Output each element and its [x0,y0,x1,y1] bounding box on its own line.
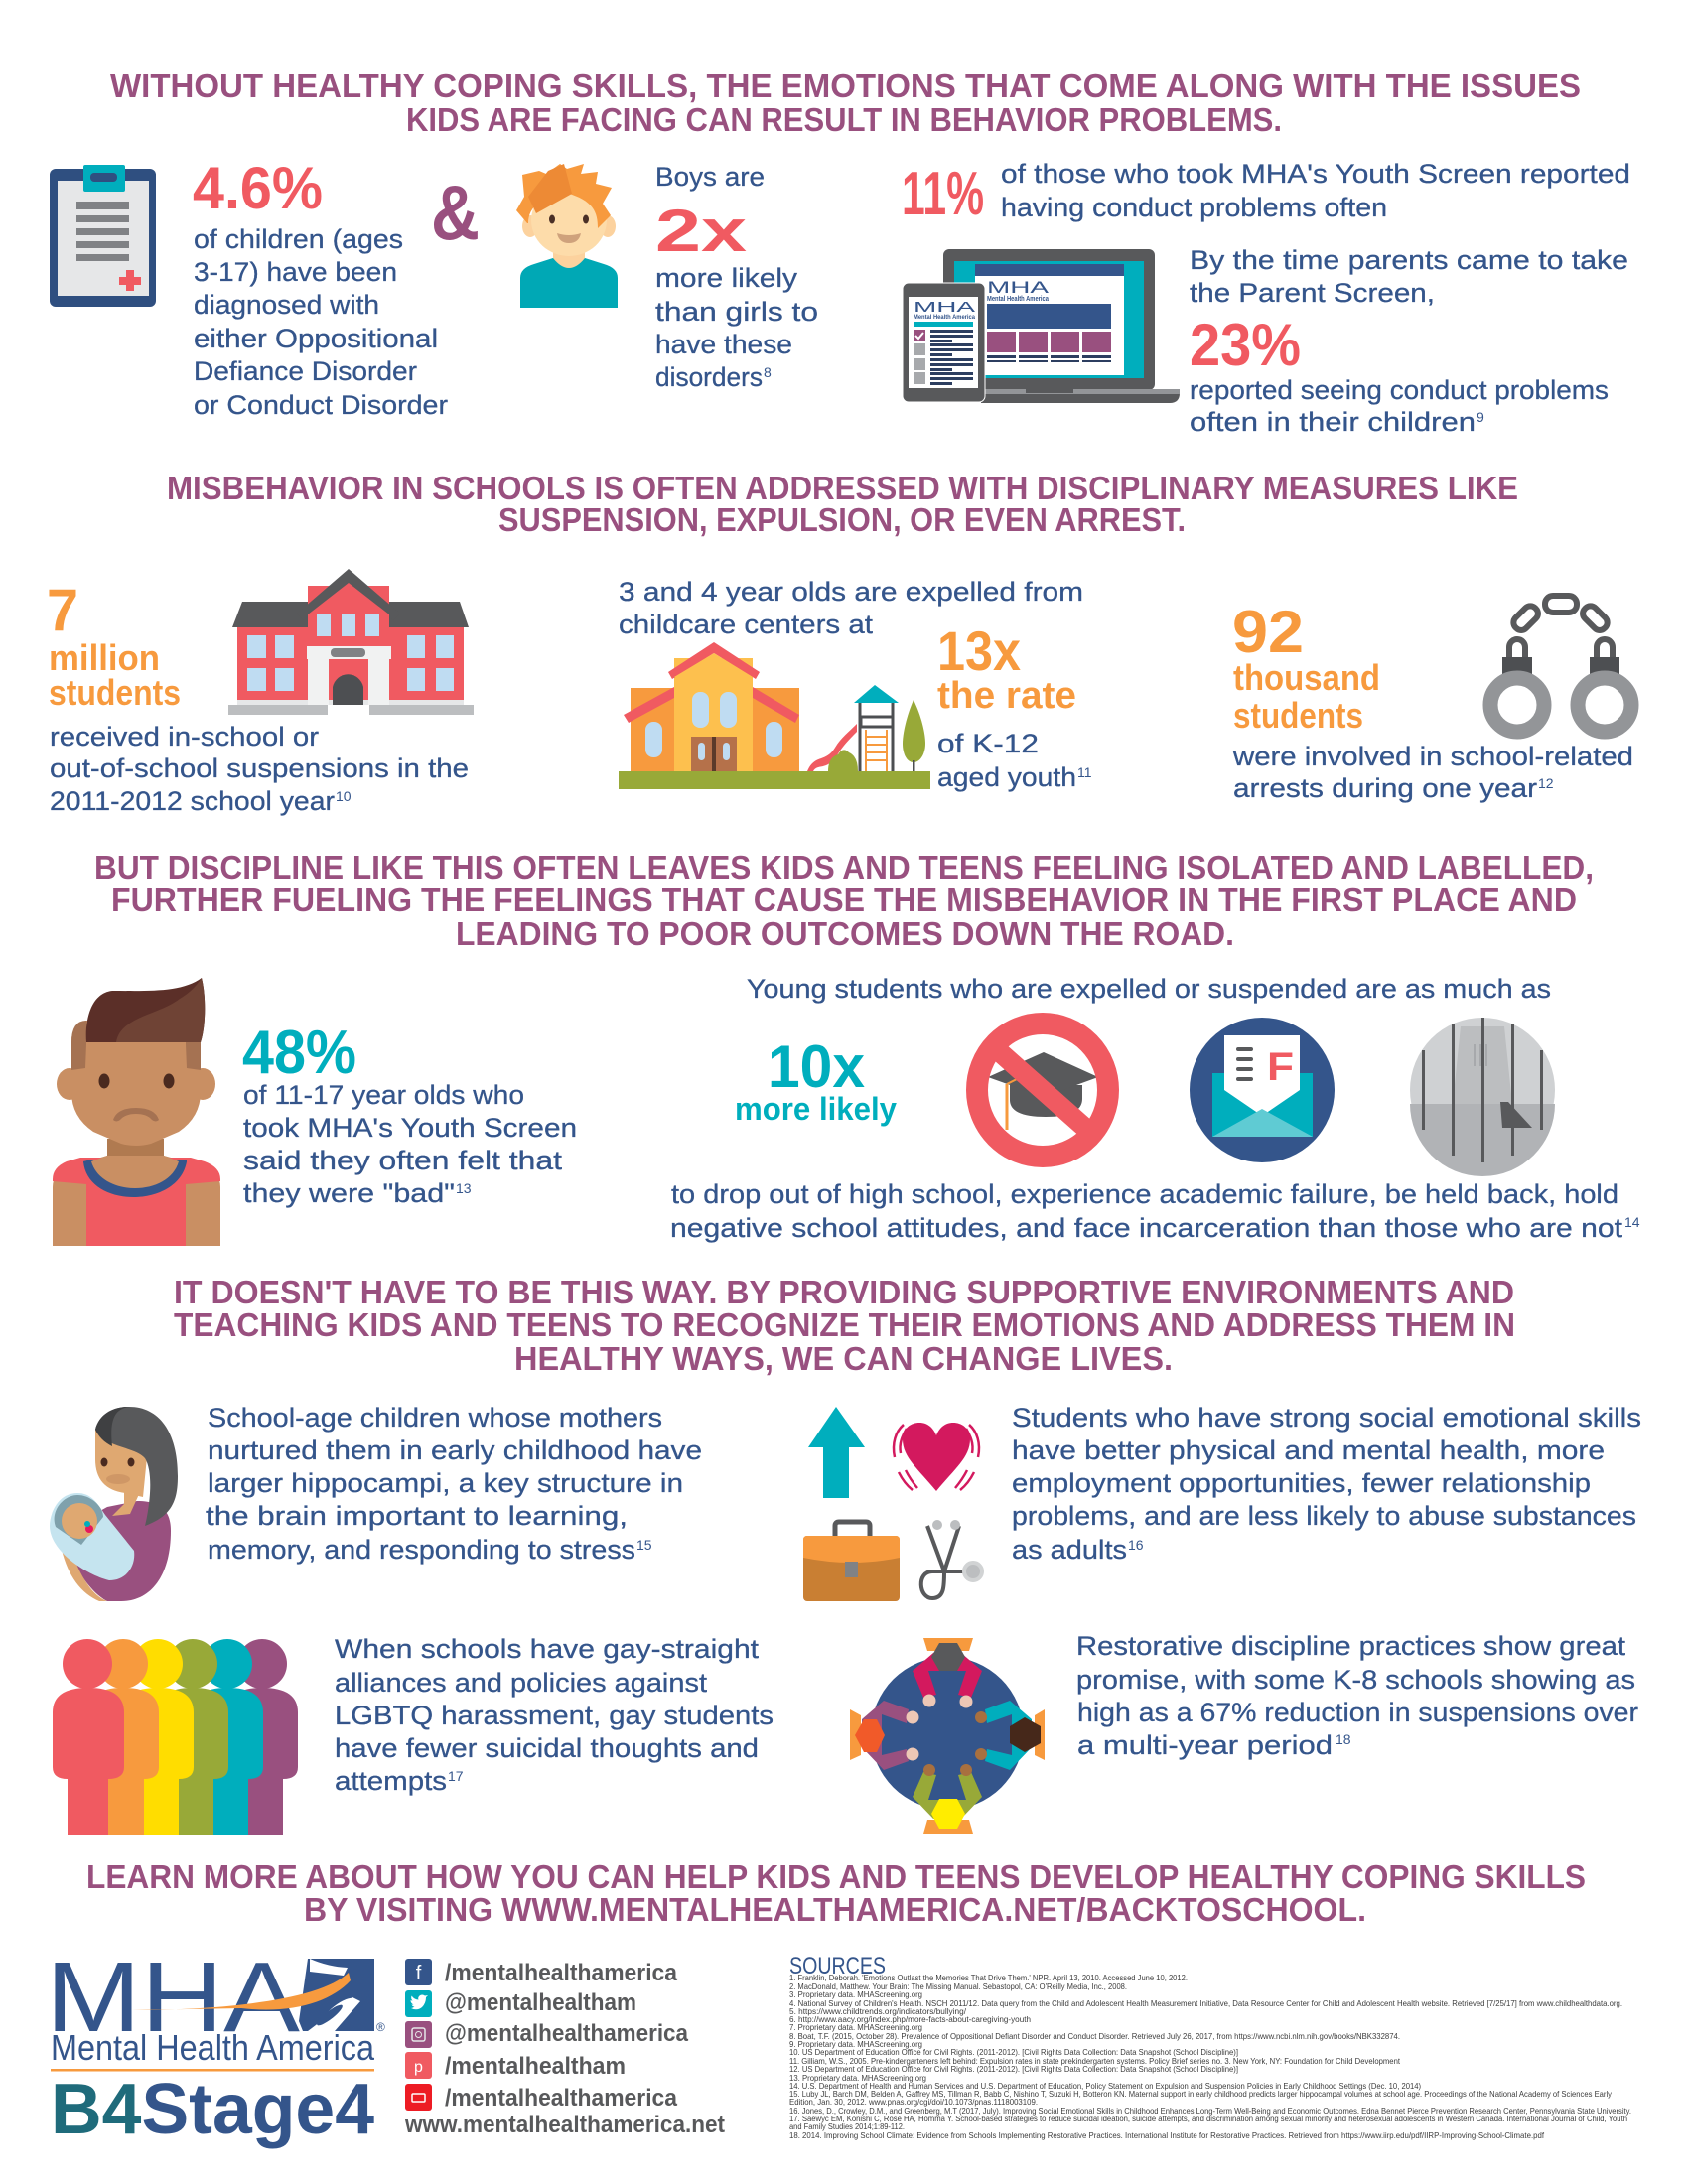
stat: 23 percent parent screen: often in their children [1190,407,1476,437]
social media links: www.mentalhealthamerica.net [404,2112,725,2138]
stat: 10x more likely: 10x [768,1033,865,1100]
icon: mother holding baby [50,1407,178,1601]
text: childcare expulsion intro [619,577,1083,639]
text: gay-straight alliances: LGBTQ harassment, gay students [335,1701,774,1730]
text: childcare expulsion intro: childcare centers at [619,610,874,639]
social media links: @mentalhealtham [445,1989,636,2016]
icon: preschool with playground [619,642,930,789]
sources list: 1. Franklin, Deborah. 'Emotions Outlast the Memories That Drive Them.' NPR. April 13, 2010. Accessed June 10, 2012. [789,1973,1188,1982]
stat: 4.6 percent [193,155,448,420]
heading: disciplinary measures [167,470,1518,538]
sources list: 2. MacDonald, Matthew. Your Brain: The Missing Manual. Sebastopol, CA: O'Reilly Media, Inc., 2008. [789,1981,1127,1991]
heading: it does not have to be this way [174,1274,1515,1377]
sources list [789,1953,1631,2140]
stat: 92 thousand students: arrests during one year [1233,773,1537,803]
stat: 48 percent felt bad: 13 [456,1180,472,1196]
text: suspensions: 2011-2012 school year [50,786,335,816]
text: social emotional skills: 16 [1128,1537,1144,1553]
icon: sad teen boy [53,978,220,1246]
text: nurturing and hippocampi: nurtured them in early childhood have [208,1435,702,1465]
text: young students intro: Young students who are expelled or suspended are as much as [747,974,1551,1004]
heading: isolated and labelled: FURTHER FUELING THE FEELINGS THAT CAUSE THE MISBEHAVIOR IN THE FIRST PLACE AND [111,882,1577,918]
stat: 13x the rate: aged youth [937,762,1076,792]
stat: boys 2x: than girls to [655,297,818,327]
sources list: 10. US Department of Education Office for Civil Rights. (2011-2012). [Civil Rights Data Collection: Data Snapshot (School Discipline)] [789,2047,1238,2057]
logo: Mental Health America B4Stage4: ® [376,2020,385,2034]
heading: isolated and labelled: LEADING TO POOR OUTCOMES DOWN THE ROAD. [456,915,1234,952]
social media links [404,1959,725,2138]
text: suspensions: out-of-school suspensions in the [50,753,469,783]
icon: laptop and phone with MHA screener: Mental Health America [914,315,976,321]
text: outcomes of expulsion [670,1179,1640,1243]
stat: 92 thousand students [1232,599,1633,803]
text: social emotional skills: have better physical and mental health, more [1012,1435,1605,1465]
stat: 13x the rate: 13x [937,619,1021,682]
stat: 4.6 percent: either Oppositional [194,324,438,353]
text: outcomes of expulsion: 14 [1624,1214,1640,1230]
social media links: @mentalhealthamerica [445,2020,689,2047]
stat: 48 percent felt bad: of 11-17 year olds who [243,1080,524,1110]
stat: 48 percent felt bad: 48% [242,1019,356,1087]
text: restorative discipline: high as a 67% reduction in suspensions over [1077,1698,1638,1727]
heading: disciplinary measures: MISBEHAVIOR IN SCHOOLS IS OFTEN ADDRESSED WITH DISCIPLINARY MEASURES LIKE [167,470,1518,506]
icon: laptop and phone with MHA screener: MHA [914,299,975,316]
stat: boys 2x [655,162,818,392]
heading: behavior problems [110,68,1581,138]
heading: learn more call to action [86,1858,1586,1928]
stat: 92 thousand students: thousand [1233,657,1380,698]
stat: 10x more likely [735,1033,897,1127]
stat: 11 percent youth screen: of those who took MHA's Youth Screen reported [1001,159,1630,189]
stat: 7 million students [47,577,181,713]
icon: vibrating heart [894,1423,979,1491]
text: social emotional skills: as adults [1012,1535,1127,1565]
icon: people around a table [850,1638,1045,1834]
logo: Mental Health America B4Stage4: Mental Health America [51,2027,375,2068]
sources list: 18. 2014. Improving School Climate: Evidence from Schools Implementing Restorative Practices. International Institute for Restorative Practices. Retrieved from https://www.iirp.edu/pdf/IIRP-Improving-School-Climate.pdf [789,2130,1545,2140]
text: social emotional skills [1012,1403,1641,1565]
sources list: 7. Proprietary data. MHAScreening.org [789,2022,922,2032]
heading: isolated and labelled: BUT DISCIPLINE LIKE THIS OFTEN LEAVES KIDS AND TEENS FEELING ISOLATED AND LABELLED, [94,849,1594,886]
stat: boys 2x: more likely [655,263,798,293]
text: nurturing and hippocampi [206,1403,702,1565]
heading: behavior problems: KIDS ARE FACING CAN RESULT IN BEHAVIOR PROBLEMS. [406,101,1282,138]
icon: laptop and phone with MHA screener: Mental Health America [987,296,1049,303]
stat: 4.6 percent: 4.6% [193,155,323,221]
text: nurturing and hippocampi: 15 [636,1537,652,1553]
icon: red school building [228,569,474,715]
heading: learn more call to action: BY VISITING WWW.MENTALHEALTHAMERICA.NET/BACKTOSCHOOL. [304,1891,1366,1928]
stat: 13x the rate: 11 [1077,764,1092,780]
social media links: f [416,1963,422,1984]
heading: it does not have to be this way: HEALTHY WAYS, WE CAN CHANGE LIVES. [514,1340,1173,1377]
stat: 23 percent parent screen: the Parent Screen, [1190,278,1435,308]
sources list: 6. http://www.aacy.org/index.php/more-facts-about-caregiving-youth [789,2014,1031,2024]
heading: learn more call to action: LEARN MORE ABOUT HOW YOU CAN HELP KIDS AND TEENS DEVELOP HEALTHY COPING SKILLS [86,1858,1586,1895]
stat: 4.6 percent: of children (ages [194,224,403,254]
sources list: 8. Boat, T.F. (2015, October 28). Prevalence of Oppositional Defiant Disorder and Conduct Disorder. Retrieved July 26, 2017, from https://www.ncbi.nlm.nih.gov/books/NBK332874. [789,2031,1400,2041]
ampersand: & [431,169,480,256]
stat: boys 2x: Boys are [655,162,765,192]
stat: 23 percent parent screen: 23% [1190,312,1301,378]
sources list: SOURCES [789,1953,886,1979]
sources list: 4. National Survey of Children's Health. NSCH 2011/12. Data query from the Child and Adolescent Health Measurement Initiative, Data Resource Center for Child and Adolescent Health website. Retrieved [7/25/17] from www.childhealthdata.org. [789,1998,1622,2008]
sources list: Edition, Jan. 30, 2012. www.pnas.org/cgi/doi/10.1073/pnas.1118003109. [789,2097,1038,2107]
heading: it does not have to be this way: TEACHING KIDS AND TEENS TO RECOGNIZE THEIR EMOTIONS AND ADDRESS THEM IN [174,1306,1515,1343]
stat: 7 million students: million [49,637,160,678]
icon: upward arrow [808,1407,865,1498]
text: outcomes of expulsion: negative school attitudes, and face incarceration than those who are not [670,1213,1623,1243]
text: restorative discipline: Restorative discipline practices show great [1076,1631,1626,1661]
stat: 23 percent parent screen: 9 [1477,409,1484,425]
stat: 48 percent felt bad: said they often felt that [243,1146,563,1175]
heading: isolated and labelled [94,849,1594,952]
stat: 23 percent parent screen: By the time parents came to take [1190,245,1628,275]
social media links: /mentalhealthamerica [445,1960,678,1986]
sources list: 13. Proprietary data. MHAScreening.org [789,2073,926,2083]
stat: 7 million students: students [49,672,181,713]
text: nurturing and hippocampi: memory, and responding to stress [208,1535,635,1565]
text: restorative discipline: 18 [1336,1731,1351,1747]
text: gay-straight alliances: alliances and policies against [335,1668,708,1698]
stat: 4.6 percent: diagnosed with [194,290,379,320]
stat: 4.6 percent: Defiance Disorder [194,356,417,386]
icon: stethoscope [921,1522,982,1598]
text: suspensions [50,722,469,816]
sources list: 14. U.S. Department of Health and Human Services and U.S. Department of Education, Policy Statement on Expulsion and Suspension Policies in Early Childhood Settings (Dec. 10, 2014) [789,2081,1421,2091]
stat: boys 2x: disorders [655,362,763,392]
text: childcare expulsion intro: 3 and 4 year olds are expelled from [619,577,1083,607]
stat: 4.6 percent: 3-17) have been [194,257,397,287]
text: outcomes of expulsion: to drop out of high school, experience academic failure, be held back, hold [671,1179,1618,1209]
stat: 13x the rate: the rate [937,675,1076,717]
stat: boys 2x: have these [655,330,792,359]
text: gay-straight alliances: 17 [448,1768,464,1784]
text: restorative discipline: a multi-year period [1077,1730,1333,1760]
logo: Mental Health America B4Stage4 [46,1942,385,2149]
text: gay-straight alliances: When schools have gay-straight [335,1634,760,1664]
text: gay-straight alliances [335,1634,774,1796]
stat: 13x the rate: of K-12 [937,729,1039,758]
sources list: 3. Proprietary data. MHAScreening.org [789,1989,922,1999]
icon: failing grade in envelope [1190,1018,1335,1162]
text: social emotional skills: Students who have strong social emotional skills [1012,1403,1641,1433]
stat: 11 percent youth screen: 11% [902,160,984,228]
stat: boys 2x: 2x [655,198,747,264]
heading: behavior problems: WITHOUT HEALTHY COPING SKILLS, THE EMOTIONS THAT COME ALONG WITH THE ISSUES [110,68,1581,104]
text: social emotional skills: employment opportunities, fewer relationship [1012,1468,1591,1498]
stat: 48 percent felt bad: took MHA's Youth Screen [243,1113,577,1143]
stat: 48 percent felt bad [242,1019,577,1208]
stat: 23 percent parent screen [1190,245,1628,437]
stat: 92 thousand students: 92 [1232,599,1304,665]
stat: 92 thousand students: students [1233,695,1363,736]
text: suspensions: 10 [336,788,352,804]
social media links: /mentalhealtham [445,2053,626,2080]
stat: 23 percent parent screen: reported seeing conduct problems [1190,375,1609,405]
text: nurturing and hippocampi: larger hippocampi, a key structure in [208,1468,683,1498]
heading: disciplinary measures: SUSPENSION, EXPULSION, OR EVEN ARREST. [498,501,1186,538]
stat: 13x the rate [937,619,1092,792]
text: suspensions: received in-school or [50,722,319,751]
sources list: 5. https://www.childtrends.org/indicators/bullying/ [789,2006,967,2016]
icon: briefcase [803,1522,900,1601]
icon: laptop and phone with MHA screener: MHA [987,278,1050,297]
sources list: and Family Studies 2014;1:89-112. [789,2121,905,2131]
icon: handcuffs [1490,596,1631,732]
stat: boys 2x: 8 [764,364,772,380]
stat: 11 percent youth screen: having conduct problems often [1001,193,1387,222]
stat: 4.6 percent: or Conduct Disorder [194,390,448,420]
heading: it does not have to be this way: IT DOESN'T HAVE TO BE THIS WAY. BY PROVIDING SUPPORTIVE ENVIRONMENTS AND [174,1274,1514,1310]
logo: Mental Health America B4Stage4: B4Stage4 [51,2070,374,2149]
icon: failing grade in envelope: F [1267,1045,1294,1089]
icon: clipboard [50,165,156,307]
stat: 92 thousand students: were involved in school-related [1232,742,1633,771]
sources list: 12. US Department of Education Office for Civil Rights. (2011-2012). [Civil Rights Data Collection: Data Snapshot (School Discipline)] [789,2064,1238,2074]
social media links: p [414,2059,423,2076]
logo: Mental Health America B4Stage4: MHA [46,1942,300,2053]
icon: jail cell [1410,1018,1555,1176]
sources list: 11. Gilliam, W.S., 2005. Pre-kindergarteners left behind: Expulsion rates in state prekindergarten systems. Policy Brief series no. 3. New York, NY: Foundation for Child Development [789,2056,1401,2066]
stat: 7 million students: 7 [47,577,78,643]
text: gay-straight alliances: attempts [335,1766,447,1796]
icon: laptop and phone with MHA screener [903,249,1180,403]
text: restorative discipline [1076,1631,1638,1760]
text: nurturing and hippocampi: School-age children whose mothers [208,1403,662,1433]
icon: no graduation cap [977,1024,1108,1157]
stat: 48 percent felt bad: they were "bad" [243,1178,455,1208]
sources list: 15. Luby JL, Barch DM, Belden A, Gaffrey MS, Tillman R, Babb C, Nishino T, Suzuki H, Botteron KN. Maternal support in early childhood predicts larger hippocampal volumes at school age. Proceedings of the National Academy of Sciences Early [789,2089,1613,2099]
text: nurturing and hippocampi: the brain important to learning, [206,1501,628,1531]
icon: boy with orange hair [516,164,618,308]
sources list: 9. Proprietary data. MHAScreening.org [789,2039,922,2049]
text: gay-straight alliances: have fewer suicidal thoughts and [335,1733,759,1763]
stat: 11 percent youth screen [902,159,1630,228]
social media links: /mentalhealthamerica [445,2085,678,2112]
text: social emotional skills: problems, and are less likely to abuse substances [1012,1501,1636,1531]
text: restorative discipline: promise, with some K-8 schools showing as [1076,1665,1635,1695]
stat: 92 thousand students: 12 [1538,775,1554,791]
icon: rainbow group of people [53,1639,298,1835]
stat: 10x more likely: more likely [735,1091,897,1127]
